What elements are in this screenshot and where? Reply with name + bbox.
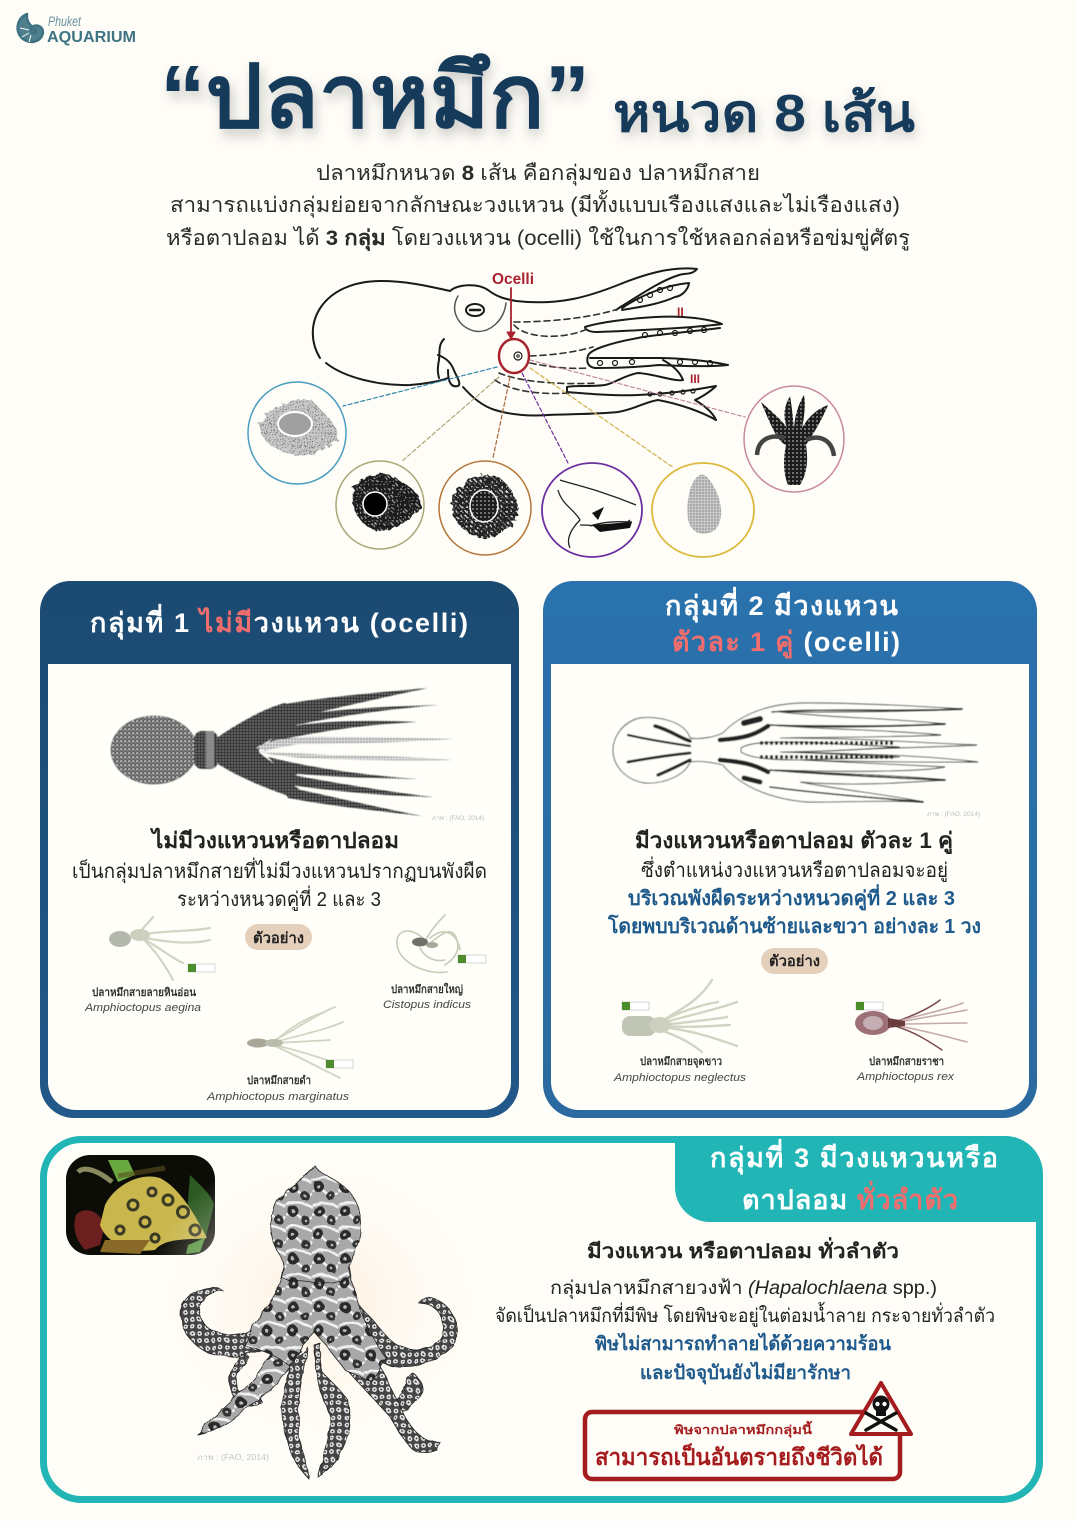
specimen: Amphioctopus marginatus: ปลาหมึกสายดำ bbox=[247, 1074, 311, 1087]
specimen: Amphioctopus rex: ปลาหมึกสายราชา bbox=[869, 1055, 944, 1068]
group 2 description: โดยพบบริเวณด้านซ้ายและขวา อย่างละ 1 วง bbox=[607, 914, 981, 938]
title: “ปลาหมึก” bbox=[160, 47, 590, 146]
group 2 description: ซึ่งตำแหน่งวงแหวนหรือตาปลอมจะอยู่ bbox=[641, 856, 948, 883]
specimen: Amphioctopus neglectus: ปลาหมึกสายจุดขาว bbox=[640, 1055, 722, 1069]
specimen: Amphioctopus marginatus bbox=[206, 1007, 353, 1103]
group 1 description: ระหว่างหนวดคู่ที่ 2 และ 3 bbox=[177, 885, 381, 912]
credit: ภาพ : (FAO, 2014) bbox=[927, 811, 980, 818]
body and web bbox=[246, 1268, 386, 1382]
logo: Phuket Aquarium: Phuket bbox=[48, 13, 82, 29]
group 1 description: เป็นกลุ่มปลาหมึกสายที่ไม่มีวงแหวนปรากฏบนพังผืด bbox=[72, 857, 487, 884]
group 3 description: กลุ่มปลาหมึกสายวงฟ้า (Hapalochlaena spp.) bbox=[550, 1278, 937, 1300]
detail circle: patterned octopus bbox=[744, 386, 844, 492]
ocellus ring bbox=[499, 339, 529, 373]
group 3 description: มีวงแหวน หรือตาปลอม ทั่วลำตัว bbox=[587, 1236, 899, 1263]
specimen: Amphioctopus neglectus bbox=[613, 980, 747, 1084]
label: arm numbers: III bbox=[690, 372, 700, 386]
panel: group 1 bbox=[40, 581, 519, 1118]
illustration: octopus top view, no ocelli bbox=[111, 688, 453, 816]
illustration: octopus top view, one pair of ocelli bbox=[613, 703, 978, 802]
group 2 description: มีวงแหวนหรือตาปลอม ตัวละ 1 คู่ bbox=[635, 828, 953, 855]
colored leader lines bbox=[343, 360, 745, 468]
far left arm bbox=[181, 1287, 285, 1356]
detail circle: arm tip bbox=[542, 463, 642, 557]
title: หนวด 8 เส้น bbox=[613, 85, 915, 143]
specimen: Cistopus indicus bbox=[383, 915, 486, 1011]
inner arm right bbox=[314, 1343, 350, 1477]
group 2 heading bbox=[665, 586, 900, 659]
example pill bbox=[245, 924, 312, 950]
small curled arm right bbox=[383, 1373, 422, 1412]
mantle bbox=[271, 1166, 362, 1282]
example pill: ตัวอย่าง bbox=[253, 930, 304, 947]
diagram: octopus side view with ocelli bbox=[313, 268, 745, 468]
specimen: Amphioctopus rex bbox=[855, 1000, 967, 1083]
detail circle: pale teardrop bbox=[652, 463, 754, 557]
logo: Phuket Aquarium bbox=[18, 13, 136, 46]
inner arm left bbox=[282, 1347, 308, 1478]
group 3 heading tab: กลุ่มที่ 3 มีวงแหวนหรือ bbox=[710, 1138, 998, 1175]
group 3 description: พิษไม่สามารถทำลายได้ด้วยความร้อน bbox=[595, 1332, 891, 1355]
intro text bbox=[166, 162, 910, 252]
group 3 heading tab bbox=[675, 1136, 1043, 1222]
specimen: Amphioctopus aegina: Amphioctopus aegina bbox=[84, 1002, 201, 1014]
specimen: Amphioctopus rex: Amphioctopus rex bbox=[856, 1071, 955, 1083]
specimen: Amphioctopus marginatus: Amphioctopus marginatus bbox=[206, 1091, 350, 1103]
title bbox=[160, 47, 916, 153]
specimen: Cistopus indicus: Cistopus indicus bbox=[383, 999, 472, 1011]
group 3 description: จัดเป็นปลาหมึกที่มีพิษ โดยพิษจะอยู่ในต่อมน้ำลาย กระจายทั่วลำตัว bbox=[495, 1302, 995, 1327]
credit: ภาพ : (FAO, 2014) bbox=[432, 815, 484, 822]
group 3 description: และปัจจุบันยังไม่มียารักษา bbox=[640, 1361, 851, 1385]
illustration: blue-ringed octopus bbox=[145, 1150, 495, 1478]
title: หนวด 8 เส้น bbox=[616, 90, 916, 148]
title: “ปลาหมึก” bbox=[164, 54, 590, 153]
body outline and arms bbox=[313, 268, 728, 420]
group 1 description bbox=[72, 827, 487, 912]
label: arm numbers: II bbox=[677, 305, 684, 319]
group 3 description bbox=[495, 1236, 995, 1385]
group 2 heading: กลุ่มที่ 2 มีวงแหวน bbox=[665, 586, 899, 623]
label: arm numbers bbox=[677, 305, 700, 386]
long arm left bbox=[198, 1345, 300, 1435]
specimen: Amphioctopus neglectus: Amphioctopus neglectus bbox=[613, 1072, 747, 1084]
long arm right bbox=[347, 1337, 440, 1453]
dashed arm lines bbox=[495, 309, 618, 393]
logo: Phuket Aquarium: AQUARIUM bbox=[47, 29, 136, 46]
specimen: Amphioctopus aegina: ปลาหมึกสายลายหินอ่อน bbox=[92, 986, 196, 999]
group 2 description bbox=[607, 828, 981, 938]
intro text: สามารถแบ่งกลุ่มย่อยจากลักษณะวงแหวน (มีทั้งแบบเรืองแสงและไม่เรืองแสง) bbox=[170, 190, 900, 218]
group 3 heading tab: ตาปลอม ทั่วลำตัว bbox=[742, 1180, 958, 1215]
suckers bbox=[598, 286, 712, 396]
group 1 heading: กลุ่มที่ 1 ไม่มีวงแหวน (ocelli) bbox=[90, 603, 468, 640]
intro text: หรือตาปลอม ได้ 3 กลุ่ม โดยวงแหวน (ocelli) ใช้ในการใช้หลอกล่อหรือข่มขู่ศัตรู bbox=[166, 226, 910, 252]
eye bbox=[455, 296, 506, 331]
icon: skull warning triangle bbox=[851, 1383, 911, 1434]
group 1 description: ไม่มีวงแหวนหรือตาปลอม bbox=[150, 827, 399, 853]
credit: ภาพ : (FAO, 2014) bbox=[197, 1453, 269, 1462]
photo: blue-ringed octopus bbox=[66, 1155, 215, 1255]
example pill: ตัวอย่าง bbox=[769, 953, 820, 970]
panel: group 2 bbox=[543, 581, 1037, 1118]
panel: group 3 bbox=[44, 1136, 1043, 1500]
detail circle: dark ocellus bbox=[336, 461, 424, 549]
detail circle: speckled ocellus bbox=[439, 461, 531, 555]
far right arm bbox=[350, 1293, 457, 1367]
warning box: สามารถเป็นอันตรายถึงชีวิตได้ bbox=[595, 1442, 883, 1470]
example pill bbox=[761, 948, 828, 974]
warning box bbox=[585, 1383, 911, 1479]
group 2 description: บริเวณพังผืดระหว่างหนวดคู่ที่ 2 และ 3 bbox=[628, 883, 955, 912]
warning box: พิษจากปลาหมึกกลุ่มนี้ bbox=[674, 1420, 813, 1438]
detail circle: pale ocellus bbox=[248, 382, 346, 484]
intro text: ปลาหมึกหนวด 8 เส้น คือกลุ่มของ ปลาหมึกสาย bbox=[316, 162, 760, 186]
loop arm left bbox=[230, 1352, 262, 1407]
group 2 heading: ตัวละ 1 คู่ (ocelli) bbox=[672, 627, 900, 659]
specimen: Cistopus indicus: ปลาหมึกสายใหญ่ bbox=[391, 982, 463, 996]
label: Ocelli arrow: Ocelli bbox=[492, 271, 534, 288]
specimen: Amphioctopus aegina bbox=[84, 917, 215, 1014]
label: Ocelli arrow bbox=[492, 271, 534, 339]
